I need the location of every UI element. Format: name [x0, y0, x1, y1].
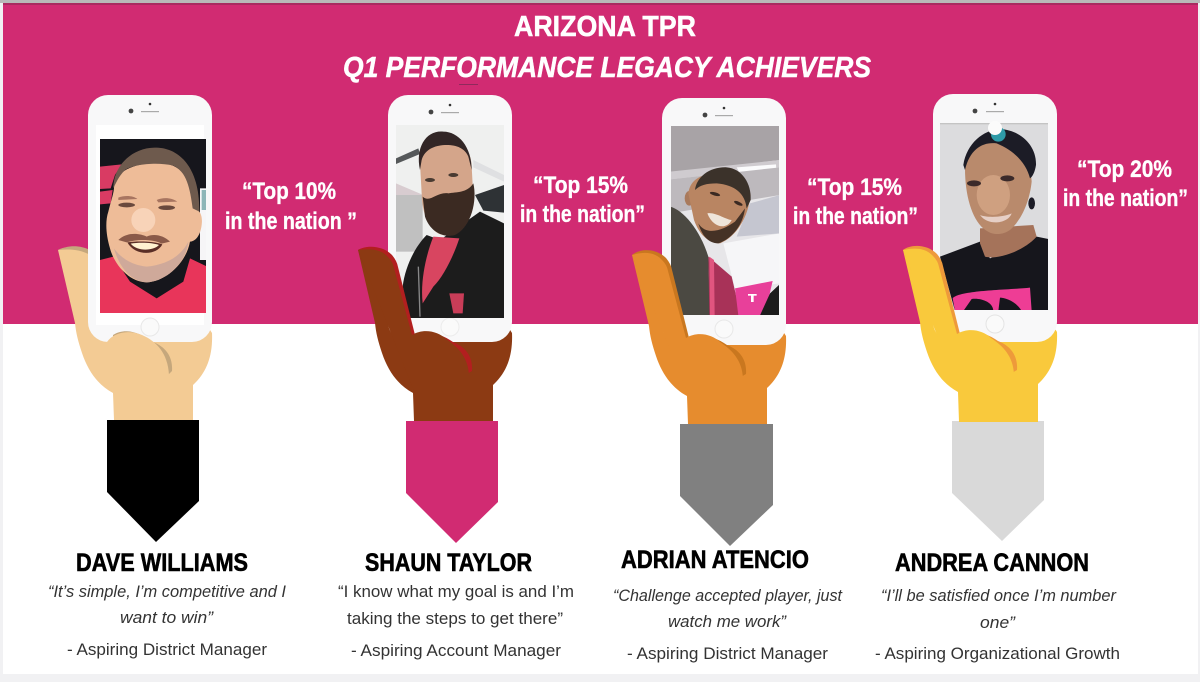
caption: Andrea: ANDREA CANNON: [895, 549, 1089, 577]
caption: Andrea: - Aspiring Organizational Growth: [875, 644, 1120, 663]
hand and phone: Shaun Taylor: [358, 95, 512, 543]
quote: Adrian: in the nation”: [793, 203, 918, 230]
caption: Dave: - Aspiring District Manager: [67, 640, 267, 659]
caption: Adrian: “Challenge accepted player, just: [613, 586, 843, 605]
phone camera notch dot: [988, 121, 1002, 135]
caption: Dave: want to win”: [120, 608, 214, 627]
caption: Adrian: ADRIAN ATENCIO: [621, 546, 809, 574]
caption: Dave: “It’s simple, I’m competitive and I: [48, 582, 286, 601]
caption: Andrea: [875, 549, 1120, 663]
caption: Shaun: SHAUN TAYLOR: [365, 549, 532, 577]
hand and phone: Andrea Cannon: [903, 94, 1057, 541]
hand and phone: Dave Williams: [58, 95, 212, 542]
phone: [388, 95, 512, 342]
caption: Shaun: - Aspiring Account Manager: [351, 641, 561, 660]
phone: [662, 98, 786, 345]
thumb over phone: [632, 250, 746, 388]
hand silhouette: [632, 252, 786, 424]
cuff: light grey: [952, 421, 1044, 541]
caption: Andrea: “I’ll be satisfied once I’m number: [881, 586, 1117, 605]
quote: Shaun: “Top 15%: [533, 172, 628, 199]
caption: Dave: DAVE WILLIAMS: [76, 549, 248, 577]
caption: Adrian: watch me work”: [668, 612, 787, 631]
hand and phone: Adrian Atencio: [632, 98, 786, 546]
photo: Adrian: [670, 125, 780, 316]
hand silhouette: [58, 247, 212, 420]
caption: Shaun: [338, 549, 574, 660]
photo: Dave: [100, 139, 208, 314]
cuff: grey: [680, 424, 773, 546]
quote: Dave: “Top 10%: [242, 178, 336, 205]
title: Q1 PERFORMANCE LEGACY ACHIEVERS: [343, 52, 872, 84]
quote: Andrea: “Top 20%: [1077, 156, 1172, 183]
caption: Shaun: “I know what my goal is and I’m: [338, 582, 574, 601]
quote: Shaun: in the nation”: [520, 201, 645, 228]
title: [343, 11, 872, 84]
quote: Shaun: [520, 172, 645, 228]
quote: Adrian: “Top 15%: [807, 174, 902, 201]
title: ARIZONA TPR: [514, 11, 696, 43]
thumb over phone: [358, 247, 472, 385]
quote: Andrea: [1063, 156, 1188, 212]
caption: Adrian: [613, 546, 843, 663]
thumb knuckle over phone: [113, 331, 172, 385]
caption: Andrea: one”: [980, 613, 1016, 632]
caption: Adrian: - Aspiring District Manager: [627, 644, 828, 663]
quote: Adrian: [793, 174, 918, 230]
caption: Dave: [48, 549, 286, 659]
caption: Shaun: taking the steps to get there”: [347, 609, 563, 628]
hand silhouette: [358, 247, 512, 421]
quote: Dave: [225, 178, 357, 235]
phone: [88, 95, 212, 342]
quote: Dave: in the nation ”: [225, 208, 357, 235]
thumb over phone: [903, 246, 1017, 384]
photo: Andrea: [939, 122, 1049, 311]
phone: [933, 94, 1057, 342]
cuff: black: [107, 420, 199, 542]
cuff: magenta: [406, 421, 498, 543]
magenta header band: [3, 3, 1198, 324]
photo: Shaun: [395, 123, 505, 320]
hand silhouette: [903, 247, 1057, 422]
